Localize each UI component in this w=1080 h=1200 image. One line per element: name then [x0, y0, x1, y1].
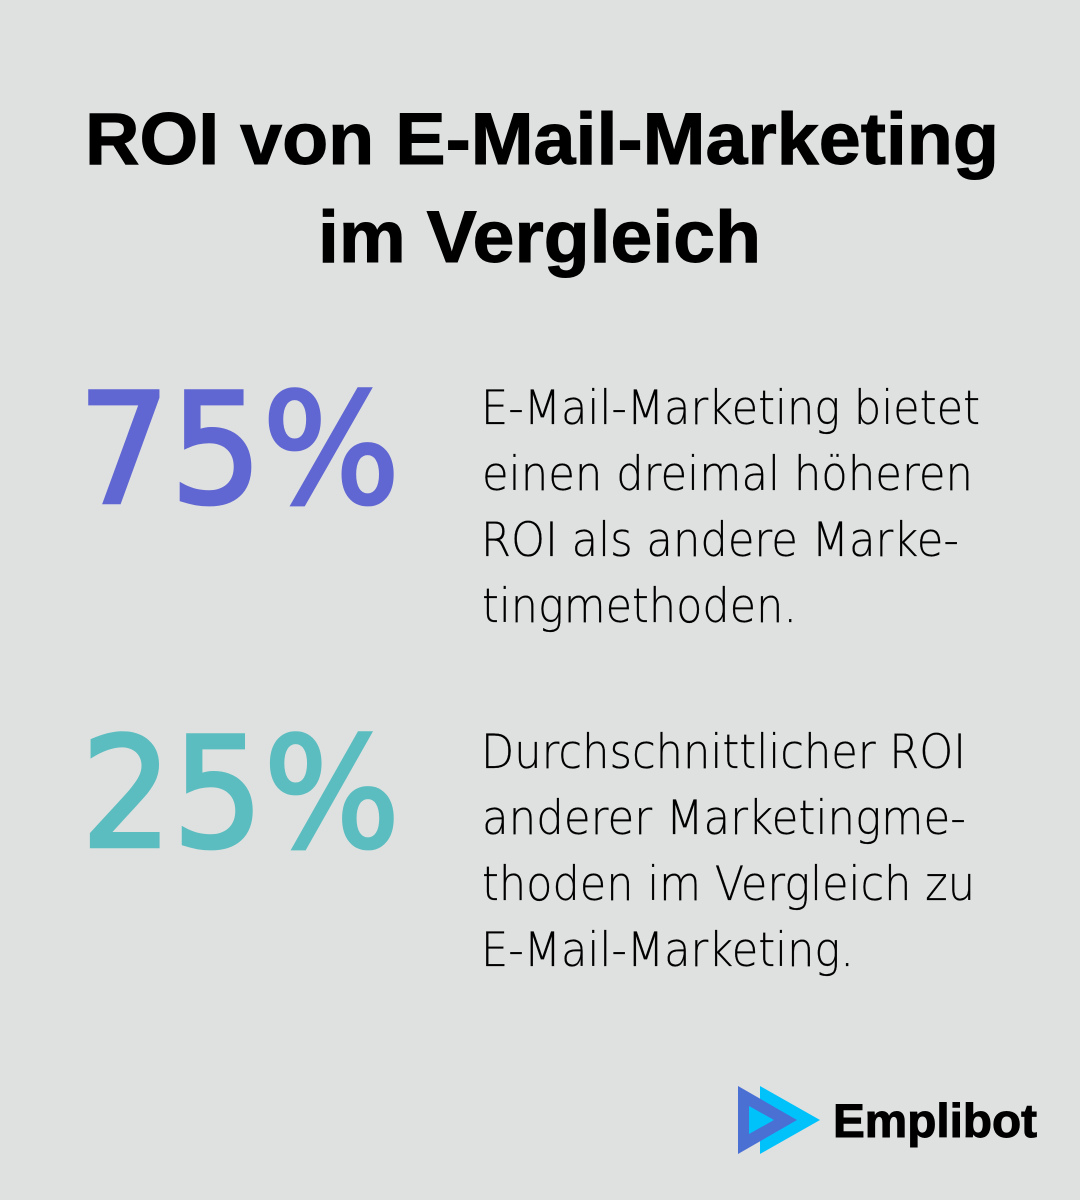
text block: email marketing ROI	[481, 381, 980, 634]
statistic: 75%: 75%	[78, 362, 400, 540]
title: ROI von E-Mail-Marketing	[85, 99, 999, 180]
title: im Vergleich	[318, 197, 761, 278]
text block: email marketing ROI: tingmethoden.	[482, 579, 797, 634]
text block: other methods ROI: Durchschnittlicher ROI	[481, 725, 966, 780]
text block: email marketing ROI: ROI als andere Marke-	[481, 513, 959, 568]
text block: email marketing ROI: einen dreimal höheren	[482, 447, 973, 502]
text block: other methods ROI: E-Mail-Marketing.	[481, 923, 854, 978]
text block: other methods ROI: thoden im Vergleich zu	[482, 857, 975, 912]
logo wordmark: Emplibot	[833, 1094, 1037, 1147]
statistic: 25%: 25%	[81, 706, 400, 884]
text block: email marketing ROI: E-Mail-Marketing bietet	[481, 381, 980, 436]
text block: other methods ROI	[481, 725, 975, 978]
title	[85, 99, 999, 278]
logo: Emplibot	[738, 1086, 1037, 1154]
icon: play triangles	[738, 1086, 820, 1154]
text block: other methods ROI: anderer Marketingme-	[482, 791, 966, 846]
